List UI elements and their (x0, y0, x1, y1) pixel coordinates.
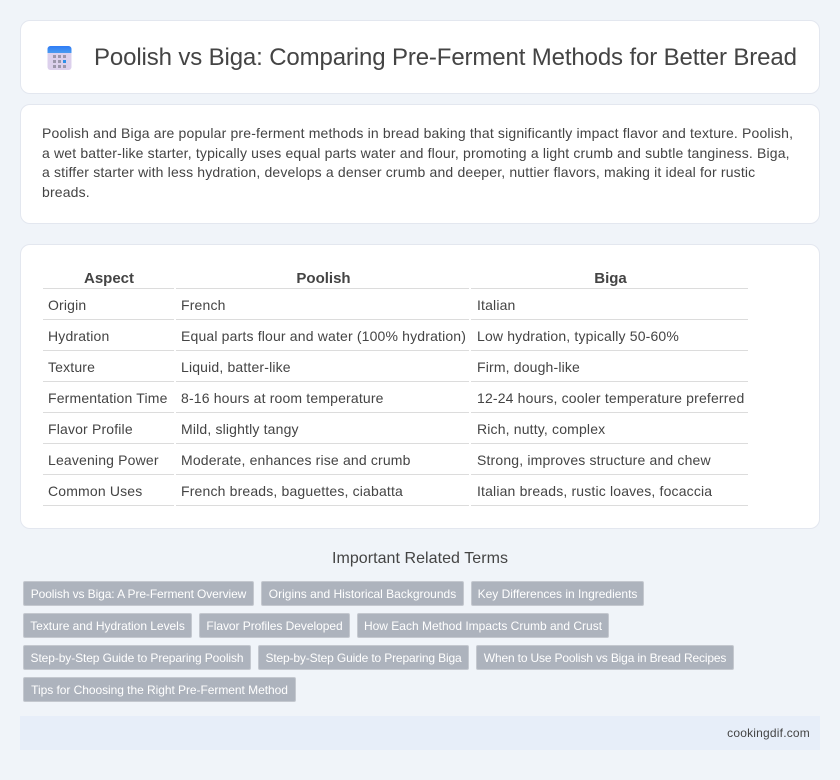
table header: Poolish (296, 270, 351, 287)
tag (476, 645, 734, 670)
row: fermentation time: 8-16 hours at room temperature (181, 390, 384, 406)
footer (20, 716, 820, 750)
row: leavening power: Leavening Power (48, 452, 159, 468)
tag (261, 581, 464, 606)
tag: Step-by-Step Guide to Preparing Biga (265, 651, 462, 665)
row: hydration: Equal parts flour and water (100% hydration) (181, 328, 466, 344)
intro paragraph (42, 125, 793, 200)
tag: Flavor Profiles Developed (206, 619, 343, 633)
row: leavening power (48, 452, 711, 468)
intro paragraph: Poolish and Biga are popular pre-ferment methods in bread baking that significantly impact flavor and texture. Poolish, (42, 125, 793, 141)
table header (84, 270, 627, 287)
tag: Tips for Choosing the Right Pre-Ferment Method (31, 683, 288, 697)
tag (471, 581, 644, 606)
comparison table panel (20, 244, 820, 529)
row: leavening power: Moderate, enhances rise and crumb (181, 452, 411, 468)
tag (357, 613, 609, 638)
footer source: cookingdif.com (727, 726, 810, 740)
row: flavor profile: Rich, nutty, complex (477, 421, 605, 437)
row: texture: Texture (48, 359, 95, 375)
icon: calendar (48, 46, 72, 70)
title: Poolish vs Biga: Comparing Pre-Ferment Methods for Better Bread (94, 44, 797, 71)
row: hydration: Hydration (48, 328, 109, 344)
row: texture (48, 359, 580, 375)
table header: Aspect (84, 270, 134, 287)
row: common uses: French breads, baguettes, ciabatta (181, 483, 403, 499)
table (43, 270, 748, 506)
row: common uses: Italian breads, rustic loaves, focaccia (477, 483, 712, 499)
intro paragraph: a wet batter-like starter, typically uses equal parts water and flour, promoting a light crumb and subtle tanginess. Biga, (42, 145, 790, 161)
tag: Texture and Hydration Levels (30, 619, 185, 633)
row: fermentation time (48, 390, 744, 406)
tag (23, 645, 251, 670)
tag: Poolish vs Biga: A Pre-Ferment Overview (31, 587, 246, 601)
row: texture: Liquid, batter-like (181, 359, 291, 375)
row: flavor profile: Flavor Profile (48, 421, 133, 437)
row: origin: Origin (48, 297, 86, 313)
row: flavor profile (48, 421, 605, 437)
related term tags (23, 581, 734, 702)
related terms heading: Important Related Terms (332, 550, 508, 567)
row: fermentation time: 12-24 hours, cooler temperature preferred (477, 390, 744, 406)
row: origin (48, 297, 516, 313)
tag: When to Use Poolish vs Biga in Bread Recipes (484, 651, 726, 665)
row: origin: French (181, 297, 226, 313)
tag (258, 645, 469, 670)
row: origin: Italian (477, 297, 516, 313)
tag (199, 613, 350, 638)
intro text panel (20, 104, 820, 224)
tag: Origins and Historical Backgrounds (269, 587, 456, 601)
tag: How Each Method Impacts Crumb and Crust (364, 619, 602, 633)
row: fermentation time: Fermentation Time (48, 390, 168, 406)
intro paragraph: a stiffer starter with less hydration, develops a denser crumb and deeper, nuttier flavors, making it ideal for rustic (42, 164, 755, 180)
row: leavening power: Strong, improves structure and chew (477, 452, 711, 468)
row: hydration: Low hydration, typically 50-60% (477, 328, 679, 344)
tag (23, 613, 192, 638)
tag: Key Differences in Ingredients (478, 587, 637, 601)
row: common uses (48, 483, 712, 499)
row: common uses: Common Uses (48, 483, 142, 499)
table header: Biga (594, 270, 627, 287)
tag: Step-by-Step Guide to Preparing Poolish (31, 651, 243, 665)
row: hydration (48, 328, 679, 344)
row: texture: Firm, dough-like (477, 359, 580, 375)
tag (23, 677, 296, 702)
row: flavor profile: Mild, slightly tangy (181, 421, 299, 437)
header panel (20, 20, 820, 94)
tag (23, 581, 254, 606)
intro paragraph: breads. (42, 184, 90, 200)
